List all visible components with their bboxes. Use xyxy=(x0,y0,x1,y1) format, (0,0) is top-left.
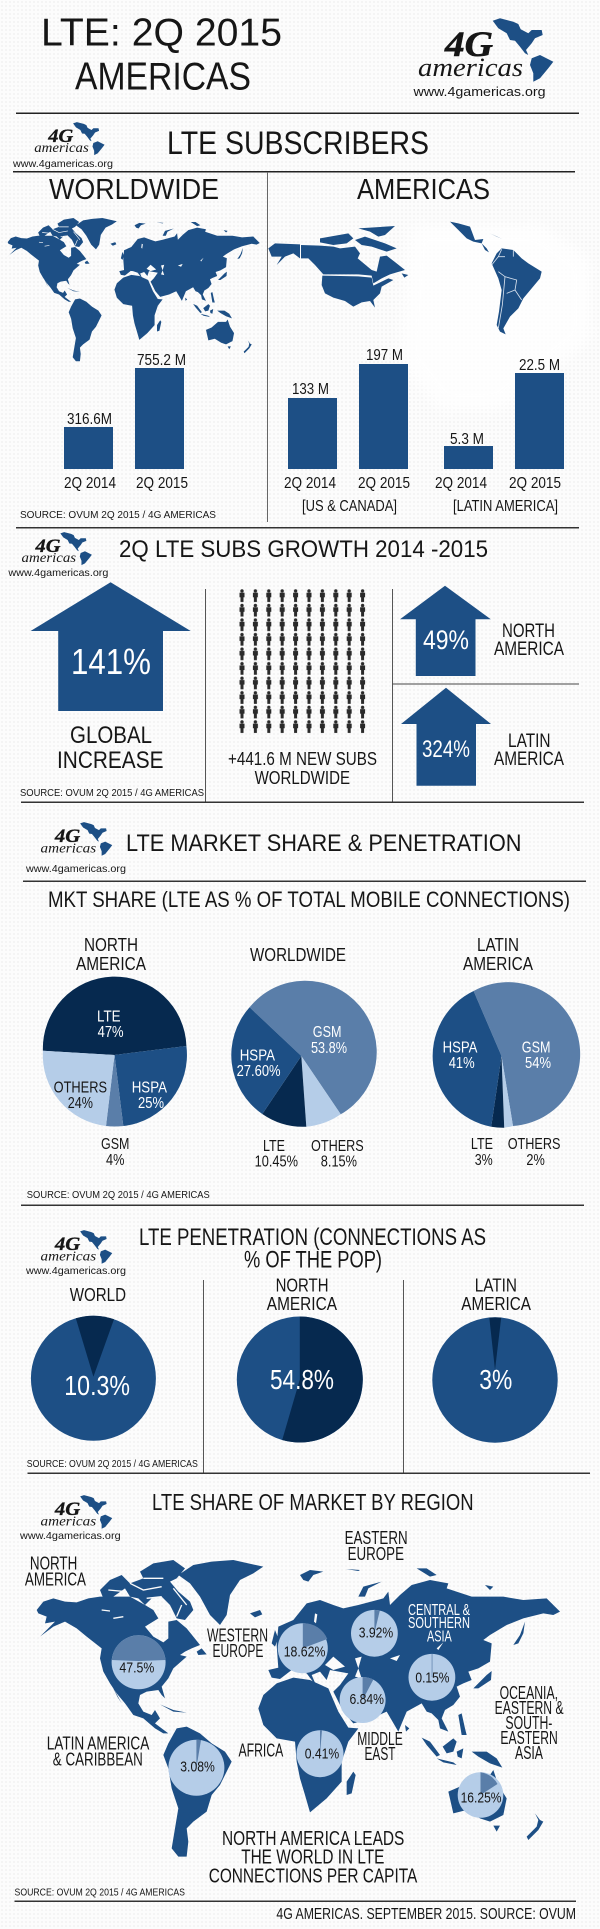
logo: 4G Americas small: 4G xyxy=(34,536,61,557)
label: Central and Southern Asia: CENTRAL & xyxy=(408,1602,470,1619)
logo: 4G Americas small xyxy=(41,1495,112,1529)
logo url small: www.4gamericas.org xyxy=(25,1265,126,1277)
label: Latin America and Caribbean xyxy=(47,1733,149,1770)
logo: 4G Americas small: americas xyxy=(41,841,96,856)
pie: Latin America: AMERICA xyxy=(463,954,533,974)
pie: Latin America: 54% xyxy=(525,1055,551,1072)
pie: North America: 47% xyxy=(98,1024,124,1041)
pie: Latin America penetration: LATIN xyxy=(475,1276,517,1296)
heading: LTE penetration: LTE PENETRATION (CONNECTIONS AS xyxy=(139,1224,486,1251)
label: North America: AMERICA xyxy=(25,1570,86,1590)
logo url small: www.4gamericas.org xyxy=(19,1530,121,1542)
map: world xyxy=(7,218,260,361)
logo: 4G Americas small xyxy=(22,532,92,565)
bar chart: worldwide: 316.6M xyxy=(67,411,112,428)
pie: worldwide: OTHERS xyxy=(311,1138,364,1155)
pie marker: Central and Southern Asia 0.15%: 0.15% xyxy=(415,1670,450,1687)
label: Middle East: MIDDLE xyxy=(357,1729,403,1749)
pie: North America: NORTH xyxy=(84,935,138,955)
heading: LTE subscribers: LTE SUBSCRIBERS xyxy=(167,125,429,161)
pie: North America penetration: NORTH xyxy=(276,1276,328,1296)
pie: North America: 25% xyxy=(138,1095,164,1112)
pie: North America penetration xyxy=(237,1276,363,1442)
arrow: North America 49%: 49% xyxy=(423,625,469,655)
pie: Latin America penetration xyxy=(432,1276,558,1443)
pie: Latin America xyxy=(433,935,580,1169)
pie: worldwide: 53.8% xyxy=(311,1040,347,1057)
bar chart: worldwide: 2Q 2014 xyxy=(64,475,116,492)
bar chart: Latin America: [LATIN AMERICA] xyxy=(453,498,558,515)
label: global increase xyxy=(57,722,164,774)
title: LTE: 2Q 2015 xyxy=(41,12,282,54)
pie marker: Latin America 3.08%: 3.08% xyxy=(180,1759,215,1776)
pie marker: Oceania 16.25%: 16.25% xyxy=(461,1790,502,1807)
label: Latin America: AMERICA xyxy=(494,749,564,770)
pie: worldwide: GSM xyxy=(313,1024,342,1041)
label: Central and Southern Asia xyxy=(408,1602,470,1646)
white glow behind americas map xyxy=(400,225,590,410)
callout: North America leads: CONNECTIONS PER CAPITA xyxy=(209,1865,418,1887)
label: Western Europe: EUROPE xyxy=(212,1641,263,1661)
bar chart: worldwide: 2Q 2015 xyxy=(136,475,188,492)
heading: LTE penetration: % OF THE POP) xyxy=(244,1247,382,1274)
heading: share by region: LTE SHARE OF MARKET BY REGION xyxy=(152,1489,474,1515)
label: global increase: GLOBAL xyxy=(70,722,152,749)
pie marker: Latin America 3.08% xyxy=(168,1740,224,1796)
label: North America xyxy=(494,621,564,660)
pie: world penetration: WORLD xyxy=(70,1285,126,1305)
logo: 4G Americas small: 4G xyxy=(54,1499,81,1520)
bar chart: US and Canada: 2Q 2014 xyxy=(284,475,336,492)
label: Oceania: OCEANIA, xyxy=(500,1683,558,1703)
logo: 4G Americas small: americas xyxy=(41,1249,96,1264)
pie: North America xyxy=(43,935,187,1169)
pie marker: Western Europe 18.62% xyxy=(278,1623,328,1673)
title: AMERICAS xyxy=(75,56,251,98)
pie: Latin America: GSM xyxy=(522,1040,550,1057)
label: Oceania: EASTERN & xyxy=(495,1698,564,1718)
map: US and Canada / Latin America xyxy=(268,222,542,334)
pie: North America: GSM xyxy=(101,1136,129,1153)
pie: North America: 4% xyxy=(106,1152,124,1169)
bar chart: worldwide xyxy=(64,352,188,492)
label: Eastern Europe xyxy=(345,1528,408,1564)
callout: North America leads xyxy=(209,1828,418,1887)
heading: americas: AMERICAS xyxy=(357,174,490,206)
source note: SOURCE: OVUM 2Q 2015 / 4G AMERICAS xyxy=(27,1458,198,1470)
pie marker: Middle East 6.84% xyxy=(340,1677,386,1723)
label: Central and Southern Asia: ASIA xyxy=(427,1629,452,1646)
arrow: global increase 141% xyxy=(31,582,191,711)
arrow: Latin America 324%: 324% xyxy=(422,736,470,763)
logo: 4G Americas: americas xyxy=(418,53,523,82)
logo: 4G Americas small: 4G xyxy=(47,126,74,147)
label: Africa: AFRICA xyxy=(238,1741,283,1761)
bar chart: Latin America xyxy=(435,357,564,515)
label: Oceania xyxy=(495,1683,564,1763)
bar chart: Latin America: 22.5 M xyxy=(519,357,560,374)
pie marker: Oceania 16.25% xyxy=(458,1772,503,1818)
pie marker: Africa 0.41%: 0.41% xyxy=(305,1746,339,1763)
pie marker: Middle East 6.84%: 6.84% xyxy=(350,1691,384,1708)
logo: 4G Americas xyxy=(418,18,553,82)
label: Oceania: SOUTH- xyxy=(505,1713,552,1733)
label: North America: NORTH xyxy=(30,1553,77,1573)
pie marker: Eastern Europe 3.92% xyxy=(351,1610,398,1657)
label: Eastern Europe: EUROPE xyxy=(348,1544,404,1564)
bar chart: worldwide: 755.2 M xyxy=(137,352,186,369)
label: new subs: +441.6 M NEW SUBS xyxy=(228,749,377,769)
bar chart: US and Canada: 2Q 2015 xyxy=(358,475,410,492)
logo url: www.4gamericas.org xyxy=(412,84,546,99)
heading: LTE penetration xyxy=(139,1224,486,1274)
logo: 4G Americas small: 4G xyxy=(54,1234,81,1255)
pie: Latin America: LATIN xyxy=(477,935,519,955)
label: North America: NORTH xyxy=(502,621,555,642)
label: Eastern Europe: EASTERN xyxy=(345,1528,408,1548)
pie: North America: LTE xyxy=(97,1009,121,1026)
icon grid: people xyxy=(238,589,372,734)
pie: worldwide: WORLDWIDE xyxy=(250,945,346,965)
label: Oceania: EASTERN xyxy=(500,1728,558,1748)
bar chart: Latin America: 2Q 2015 xyxy=(509,475,561,492)
pie: North America penetration: AMERICA xyxy=(267,1294,337,1314)
pie: Latin America: LTE xyxy=(471,1136,493,1153)
label: Middle East: EAST xyxy=(364,1744,396,1764)
pie: Latin America: HSPA xyxy=(443,1040,478,1057)
source note: SOURCE: OVUM 2Q 2015 / 4G AMERICAS xyxy=(27,1189,210,1201)
heading: worldwide: WORLDWIDE xyxy=(49,174,219,206)
logo url small: www.4gamericas.org xyxy=(12,158,113,170)
arrow: North America 49% xyxy=(400,586,491,676)
logo: 4G Americas small xyxy=(34,122,105,155)
arrow: Latin America 324% xyxy=(401,688,491,786)
logo: 4G Americas small xyxy=(41,822,112,856)
label: Oceania: ASIA xyxy=(515,1743,543,1763)
bar chart: US and Canada xyxy=(284,347,410,515)
pie: worldwide: LTE xyxy=(263,1138,285,1155)
title xyxy=(41,12,282,98)
pie marker: North America 47.5%: 47.5% xyxy=(119,1659,154,1676)
pie marker: North America 47.5% xyxy=(112,1635,166,1689)
label: North America: AMERICA xyxy=(494,639,564,660)
callout: North America leads: THE WORLD IN LTE xyxy=(241,1847,384,1869)
arrow: global increase 141%: 141% xyxy=(71,641,151,682)
logo: 4G Americas small: americas xyxy=(41,1514,96,1529)
label: Middle East xyxy=(357,1729,403,1764)
panel: LTE subscribers xyxy=(7,122,590,522)
bar chart: Latin America: 2Q 2014 xyxy=(435,475,487,492)
logo url small: www.4gamericas.org xyxy=(7,567,109,579)
bar chart: Latin America: 5.3 M xyxy=(450,431,484,448)
panel: LTE share by region xyxy=(14,1489,564,1899)
heading: market share and penetration: LTE MARKET SHARE & PENETRATION xyxy=(126,830,522,857)
label: new subs: WORLDWIDE xyxy=(255,768,350,788)
pie marker: Eastern Europe 3.92%: 3.92% xyxy=(359,1624,393,1641)
source note: SOURCE: OVUM 2Q 2015 / 4G AMERICAS xyxy=(20,787,204,799)
label: new subs xyxy=(228,749,377,788)
pie: Latin America: 2% xyxy=(526,1152,545,1169)
label: Latin America xyxy=(494,731,564,770)
pie: North America: HSPA xyxy=(132,1080,167,1097)
bar chart: US and Canada: 133 M xyxy=(292,381,329,398)
heading: subs growth: 2Q LTE SUBS GROWTH 2014 -2015 xyxy=(119,536,488,563)
pie: North America: OTHERS xyxy=(54,1080,107,1097)
source note: SOURCE: OVUM 2Q 2015 / 4G AMERICAS xyxy=(20,509,216,521)
pie: North America: 24% xyxy=(68,1095,93,1112)
panel: LTE subs growth xyxy=(7,532,579,802)
pie: Latin America: 41% xyxy=(449,1055,475,1072)
label: Latin America: LATIN xyxy=(508,731,550,752)
pie: Latin America penetration: 3% xyxy=(479,1364,512,1395)
pie: world penetration xyxy=(31,1285,156,1441)
logo: 4G Americas small: americas xyxy=(34,140,89,155)
logo: 4G Americas small: 4G xyxy=(54,826,81,847)
callout: North America leads: NORTH AMERICA LEADS xyxy=(222,1828,404,1850)
pie marker: Western Europe 18.62%: 18.62% xyxy=(284,1644,325,1661)
panel: LTE penetration xyxy=(25,1224,558,1473)
header panel xyxy=(41,12,553,99)
pie: world penetration: 10.3% xyxy=(64,1370,130,1401)
map: world regions xyxy=(35,1560,560,1857)
label: Latin America and Caribbean: LATIN AMERICA xyxy=(47,1733,149,1753)
pie: worldwide: HSPA xyxy=(240,1048,275,1065)
label: Latin America and Caribbean: & CARIBBEAN xyxy=(53,1750,143,1770)
pie: worldwide xyxy=(231,945,377,1171)
pie: worldwide: 8.15% xyxy=(321,1154,357,1171)
pie: worldwide: 27.60% xyxy=(237,1063,281,1080)
pie: North America: AMERICA xyxy=(76,954,146,974)
pie: Latin America penetration: AMERICA xyxy=(461,1294,531,1314)
label: Western Europe xyxy=(207,1626,268,1661)
bar chart: US and Canada: 197 M xyxy=(366,347,403,364)
logo url small: www.4gamericas.org xyxy=(25,863,126,875)
pie marker: Central and Southern Asia 0.15% xyxy=(408,1654,455,1701)
label: global increase: INCREASE xyxy=(57,747,164,774)
logo: 4G Americas: 4G xyxy=(444,24,493,64)
label: North America xyxy=(25,1553,86,1590)
pie: Latin America: OTHERS xyxy=(508,1136,560,1153)
pie: worldwide: 10.45% xyxy=(255,1154,298,1171)
panel: LTE market share xyxy=(23,822,586,1201)
label: Western Europe: WESTERN xyxy=(207,1626,268,1646)
pie marker: Africa 0.41% xyxy=(296,1730,344,1777)
source note: SOURCE: OVUM 2Q 2015 / 4G AMERICAS xyxy=(14,1887,185,1899)
label: Central and Southern Asia: SOUTHERN xyxy=(408,1615,470,1632)
pie: North America penetration: 54.8% xyxy=(270,1364,334,1395)
logo: 4G Americas small: americas xyxy=(22,550,76,565)
logo: 4G Americas small xyxy=(41,1230,112,1264)
pie: Latin America: 3% xyxy=(475,1152,493,1169)
bar chart: US and Canada: [US & CANADA] xyxy=(302,498,397,515)
